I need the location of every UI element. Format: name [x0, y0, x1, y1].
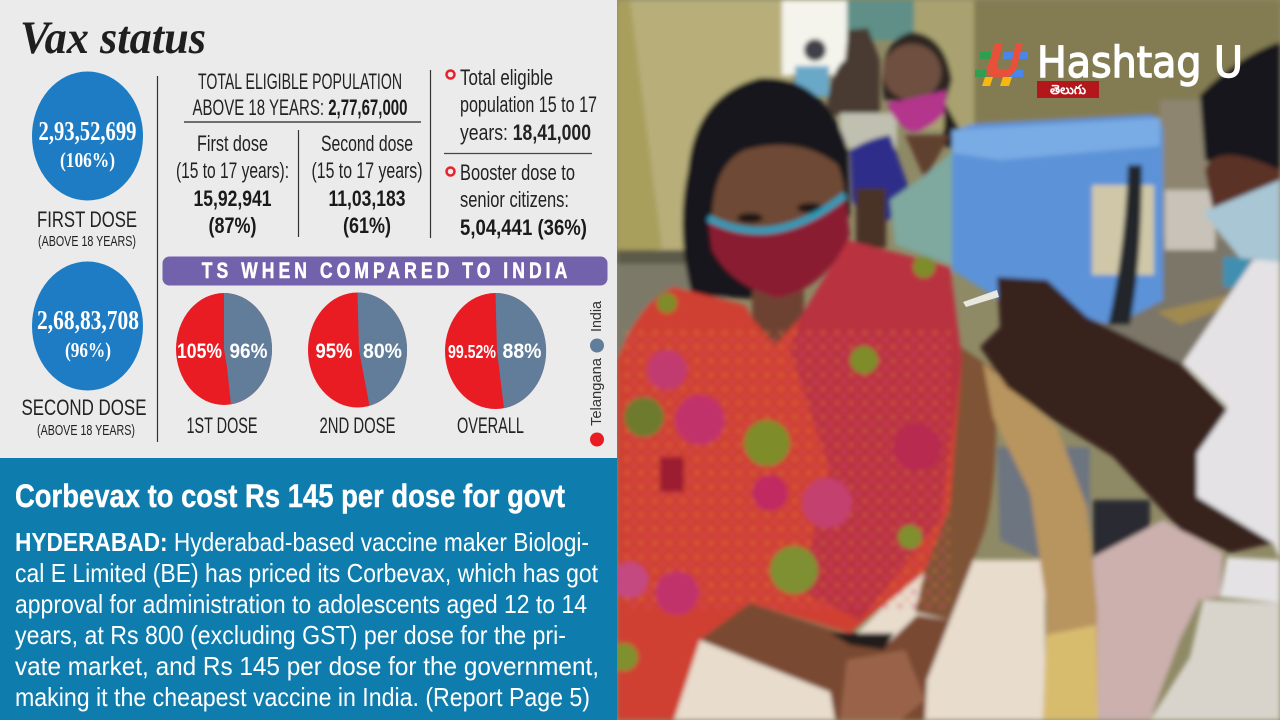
woman hair [682, 78, 850, 300]
logo: hashtag u telugu: తెలుగు [1050, 82, 1086, 97]
pie: 1st dose: 96% [230, 340, 268, 363]
pie: 1st dose: 1ST DOSE [186, 413, 258, 438]
article text: approval for administration to adolescents aged 12 to 14 [15, 589, 587, 619]
article text: making it the cheapest vaccine in India. (Report Page 5) [15, 682, 590, 712]
region behind chair [997, 447, 1090, 560]
title: Vax status [20, 12, 206, 64]
banner [162, 256, 608, 286]
first dose label [37, 207, 137, 250]
booster dose [446, 160, 587, 240]
nurse hand and arm [980, 277, 1273, 553]
banner: TS WHEN COMPARED TO INDIA [202, 259, 567, 284]
total eligible population: ABOVE 18 YEARS: 2,77,67,000 [192, 95, 408, 120]
second dose 15 to 17: (15 to 17 years) [312, 158, 422, 183]
forearm and hands [700, 603, 950, 720]
photo: girl receiving vaccination [610, 0, 1280, 720]
back wall right [914, 0, 974, 130]
syringe [963, 290, 999, 307]
pie: 1st dose [176, 293, 272, 438]
first dose label: FIRST DOSE [37, 207, 137, 232]
pie: overall: OVERALL [457, 413, 524, 438]
first dose circle: 2,93,52,699 [38, 116, 136, 146]
mask [708, 195, 850, 298]
lap [674, 560, 1045, 720]
white sheet lower right [1150, 600, 1280, 720]
woman upper arm [915, 340, 996, 620]
dress [617, 240, 962, 720]
first dose 15 to 17: (15 to 17 years): [176, 158, 289, 183]
booster dose: 5,04,441 (36%) [460, 215, 587, 240]
second dose label [22, 395, 146, 439]
logo: hashtag u telugu: Hashtag U [1037, 38, 1243, 88]
logo: hashtag u telugu [975, 38, 1243, 98]
first dose circle [32, 72, 143, 200]
legend: Telangana [588, 357, 605, 426]
first dose 15 to 17: 15,92,941 [194, 186, 272, 211]
legend: India [588, 300, 605, 332]
panel: vax status [0, 0, 617, 458]
first dose 15 to 17: (87%) [208, 213, 256, 238]
face [712, 145, 844, 240]
floral cloth right [1093, 520, 1223, 720]
icon: hash mark [975, 43, 1028, 86]
second dose circle: (96%) [65, 338, 111, 362]
legend [588, 300, 605, 446]
total eligible population [192, 69, 408, 120]
first dose 15 to 17: First dose [197, 131, 268, 156]
pie: 2nd dose: 80% [363, 340, 402, 363]
background people [804, 39, 826, 61]
cooler box [952, 115, 1163, 325]
pie: overall [445, 293, 546, 438]
second dose label: (ABOVE 18 YEARS) [37, 422, 135, 439]
second dose 15 to 17 [312, 131, 422, 238]
booster dose: Booster dose to [460, 160, 575, 185]
article text: years, at Rs 800 (excluding GST) per dose for the pri- [15, 620, 566, 650]
pale arm [981, 362, 1100, 670]
second dose 15 to 17: 11,03,183 [328, 186, 406, 211]
first dose label: (ABOVE 18 YEARS) [38, 233, 136, 250]
pie: 2nd dose: 95% [316, 340, 353, 363]
pie: 2nd dose [308, 292, 407, 438]
second dose 15 to 17: (61%) [343, 213, 391, 238]
total eligible population: TOTAL ELIGIBLE POPULATION [198, 69, 402, 94]
total eligible 15 to 17: Total eligible [460, 65, 553, 90]
panel: corbevax news [0, 458, 617, 720]
second dose 15 to 17: Second dose [321, 131, 413, 156]
total eligible 15 to 17: population 15 to 17 [460, 92, 597, 117]
pie: overall: 99.52% [448, 342, 496, 362]
total eligible 15 to 17: years: 18,41,000 [460, 120, 591, 145]
first dose 15 to 17 [176, 131, 289, 238]
woman neck [752, 290, 804, 362]
total eligible 15 to 17 [446, 65, 597, 145]
article text: cal E Limited (BE) has priced its Corbevax, which has got [15, 558, 599, 588]
pie: overall: 88% [502, 340, 542, 363]
second dose circle [32, 262, 143, 390]
headline: Corbevax to cost Rs 145 per dose for govt [15, 478, 565, 514]
article text: HYDERABAD: Hyderabad-based vaccine maker Biologi- [15, 527, 589, 557]
nurse head [1200, 42, 1280, 185]
article text [15, 527, 599, 712]
pie: 1st dose: 105% [177, 340, 222, 363]
article text: vate market, and Rs 145 per dose for the government, [15, 651, 599, 681]
booster dose: senior citizens: [460, 187, 569, 212]
nurse uniform [1183, 260, 1280, 603]
dress flowers [655, 571, 699, 615]
second dose label: SECOND DOSE [22, 395, 146, 420]
second dose circle: 2,68,83,708 [37, 305, 139, 335]
doorway [782, 0, 847, 75]
floor [1104, 240, 1236, 367]
back wall left [617, 0, 792, 258]
pie: 2nd dose: 2ND DOSE [320, 413, 396, 438]
first dose circle: (106%) [60, 148, 115, 172]
